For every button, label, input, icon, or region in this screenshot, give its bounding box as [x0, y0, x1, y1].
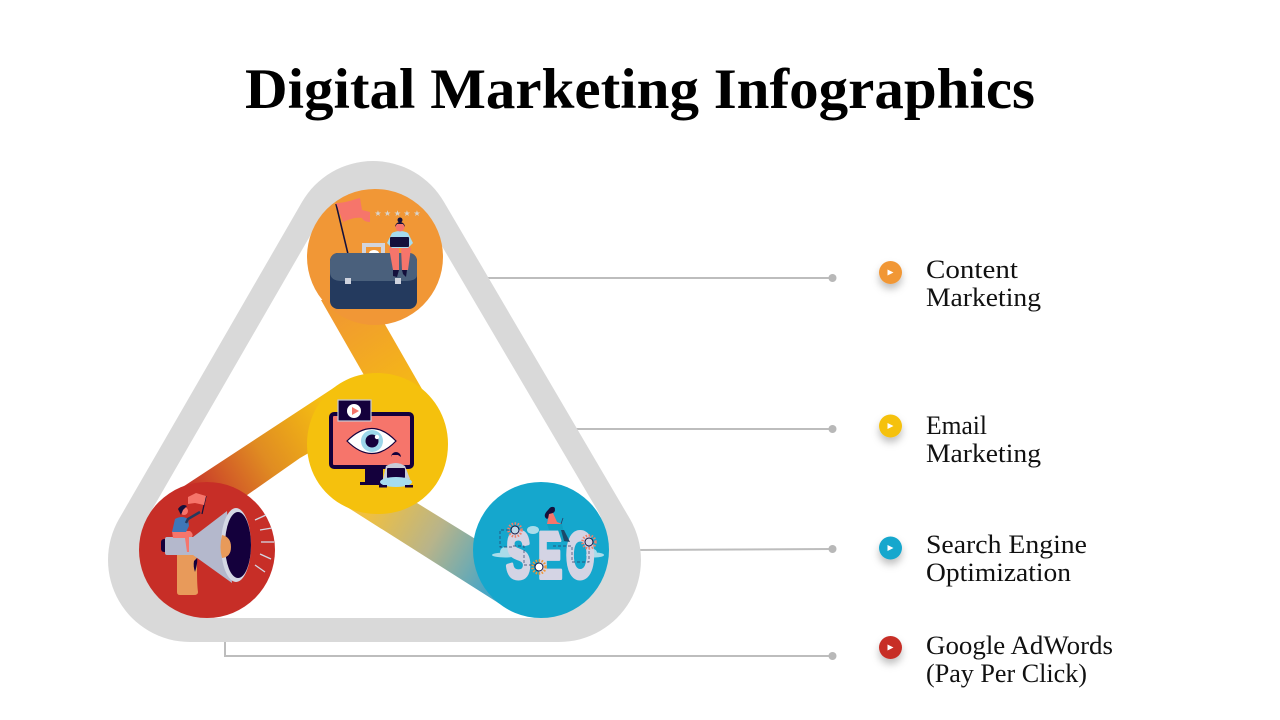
- icon: rating stars: ★: [413, 209, 421, 218]
- node: search engine optimization: [473, 482, 609, 618]
- band: red to yellow: [175, 387, 340, 500]
- icon: video box: [338, 400, 371, 421]
- rounded triangle frame: [108, 161, 641, 642]
- node: google adwords: [139, 482, 275, 618]
- icon: network dashes: [500, 530, 589, 565]
- node: content marketing: [307, 189, 443, 325]
- band: yellow to blue: [347, 503, 500, 604]
- connector: search engine optimization: [630, 545, 836, 553]
- icon: photo frame: [362, 243, 385, 256]
- icon: eye: [347, 428, 396, 454]
- icon: person with laptop: [387, 218, 413, 277]
- bullet: [879, 636, 902, 659]
- node: email marketing: [307, 373, 448, 514]
- legend: google adwords: [879, 631, 1113, 688]
- band: orange to yellow: [321, 300, 434, 410]
- legend: search engine optimization: Search Engine: [926, 530, 1087, 559]
- icon: flag: [336, 198, 370, 254]
- legend: email marketing: Email: [926, 411, 987, 440]
- title: Digital Marketing Infographics: [245, 58, 1035, 121]
- bullet: [879, 261, 902, 284]
- icon: rating stars: ★: [403, 209, 411, 218]
- icon: seated person: [379, 452, 413, 488]
- legend: content marketing: [879, 255, 1041, 312]
- icon: monitor: [331, 414, 412, 485]
- icon: clouds: [492, 526, 604, 558]
- icon: person on letters: [545, 507, 570, 542]
- icon: rating stars: ★: [374, 209, 382, 218]
- icon: briefcase: [330, 253, 417, 309]
- legend: email marketing: Marketing: [926, 439, 1041, 468]
- bullet: [879, 414, 902, 438]
- icon: megaphone: [161, 508, 251, 595]
- legend: search engine optimization: Optimization: [926, 558, 1071, 587]
- bullet: [879, 536, 902, 560]
- connector: google adwords: [225, 636, 836, 660]
- legend: content marketing: Marketing: [926, 283, 1041, 312]
- legend: email marketing: [879, 411, 1041, 468]
- icon: person with flag: [172, 493, 206, 552]
- icon: sound lines: [255, 515, 274, 572]
- connector: content marketing: [480, 274, 836, 282]
- icon: gears: [508, 524, 596, 574]
- legend: google adwords: Google AdWords: [926, 631, 1113, 660]
- legend: google adwords: (Pay Per Click): [926, 659, 1087, 688]
- legend: content marketing: Content: [926, 255, 1019, 284]
- icon: rating stars: ★: [394, 209, 401, 218]
- icon: rating stars: ★: [384, 209, 391, 218]
- legend: search engine optimization: [879, 530, 1087, 587]
- icon: rating stars: [374, 209, 421, 218]
- SEO lettering: SEO: [506, 520, 595, 593]
- connector: email marketing: [565, 425, 836, 433]
